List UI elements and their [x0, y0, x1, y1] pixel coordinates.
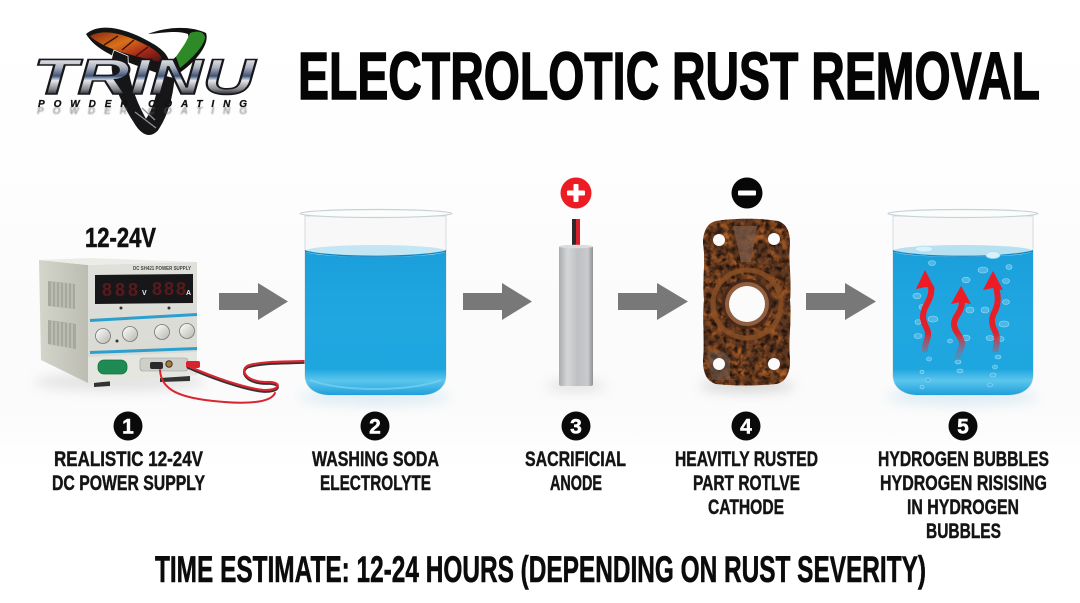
anode rod: [559, 245, 593, 386]
logo wordmark: TRINU: [33, 49, 258, 105]
power supply leads: [160, 361, 306, 403]
step 2 label: WASHING SODA: [312, 448, 439, 471]
step 1 label: DC POWER SUPPLY: [52, 472, 205, 495]
step 3 label: [525, 448, 626, 495]
beaker rim: [300, 210, 452, 218]
power supply display: DC SH421 POWER SUPPLY: [133, 266, 192, 272]
step 2: [312, 412, 439, 495]
object: beaker with hydrogen bubbles: [887, 210, 1039, 405]
beaker shadow: [887, 389, 1039, 405]
step 4 number: [732, 412, 760, 440]
surface foam: [915, 246, 1000, 258]
step 2 label: [312, 448, 439, 495]
power supply display: 888: [102, 280, 138, 300]
step 3 label: SACRIFICIAL: [525, 448, 626, 471]
rising arrow left: [916, 270, 935, 352]
arrow 3: [618, 283, 688, 320]
negative terminal symbol: [732, 178, 762, 208]
power supply display: V: [142, 290, 147, 297]
beaker glass: [305, 216, 446, 395]
beaker shadow: [299, 389, 451, 405]
step 4 label: CATHODE: [708, 496, 784, 519]
step 5 label: IN HYDROGEN: [907, 496, 1019, 519]
step 4 number: 4: [740, 416, 752, 438]
power supply display: A: [186, 290, 191, 297]
step 1 label: [52, 448, 205, 495]
voltage label: 12-24V: [85, 222, 156, 253]
object: sacrificial anode: [546, 178, 606, 391]
positive terminal symbol: [560, 178, 592, 208]
step 5 number: 5: [957, 416, 969, 438]
logo: Trinu Powder Coating: [33, 28, 258, 135]
step 4 label: HEAVITLY RUSTED: [675, 448, 818, 471]
arrow 1: [219, 283, 288, 320]
step 5 number: [948, 412, 978, 440]
power supply body: [39, 258, 197, 387]
logo tagline: POWDER COATING: [38, 99, 247, 110]
step 4: [675, 412, 818, 519]
rusted plate: [703, 219, 791, 386]
logo tagline: [37, 99, 247, 117]
step 5 label: BUBBLES: [926, 520, 1001, 543]
logo tagline: POWDER COATING: [37, 106, 247, 117]
step 1 label: REALISTIC 12-24V: [54, 448, 203, 471]
step 1 number: [114, 412, 142, 440]
liquid: [893, 245, 1033, 395]
power supply controls: [90, 306, 197, 354]
step 3: [525, 412, 626, 495]
electrolyte liquid: [305, 245, 446, 395]
object: beaker of washing soda electrolyte: [299, 210, 452, 405]
beaker glass: [893, 216, 1033, 395]
rising arrow right: [983, 271, 1003, 352]
power supply switch and terminals: [88, 352, 200, 383]
step 1: [52, 412, 205, 495]
step 1 number: 1: [122, 416, 134, 438]
anode shadow: [546, 381, 606, 391]
step 3 label: ANODE: [550, 472, 602, 495]
power supply display: [95, 266, 193, 304]
step 4 label: PART ROTLVE: [693, 472, 800, 495]
logo swirl emblem: [86, 28, 207, 135]
object: DC power supply: [34, 258, 306, 403]
step 2 number: 2: [369, 416, 381, 438]
arrow 2: [463, 283, 532, 320]
step 5 label: [878, 448, 1049, 543]
power supply shadow: [34, 373, 206, 391]
arrow 4: [806, 283, 876, 320]
object: heavily rusted cathode part: [699, 178, 795, 392]
step 5: [878, 412, 1049, 543]
power supply display: 888: [152, 279, 186, 299]
red rising arrows: [916, 270, 1003, 361]
step 2 label: ELECTROLYTE: [320, 472, 431, 495]
rising arrow middle: [951, 286, 971, 361]
step 3 number: 3: [570, 416, 582, 438]
beaker rim: [888, 210, 1038, 218]
cathode shadow: [699, 380, 795, 392]
step 4 label: [675, 448, 818, 519]
anode wire: [572, 219, 580, 247]
rising bubbles: [913, 260, 1012, 389]
